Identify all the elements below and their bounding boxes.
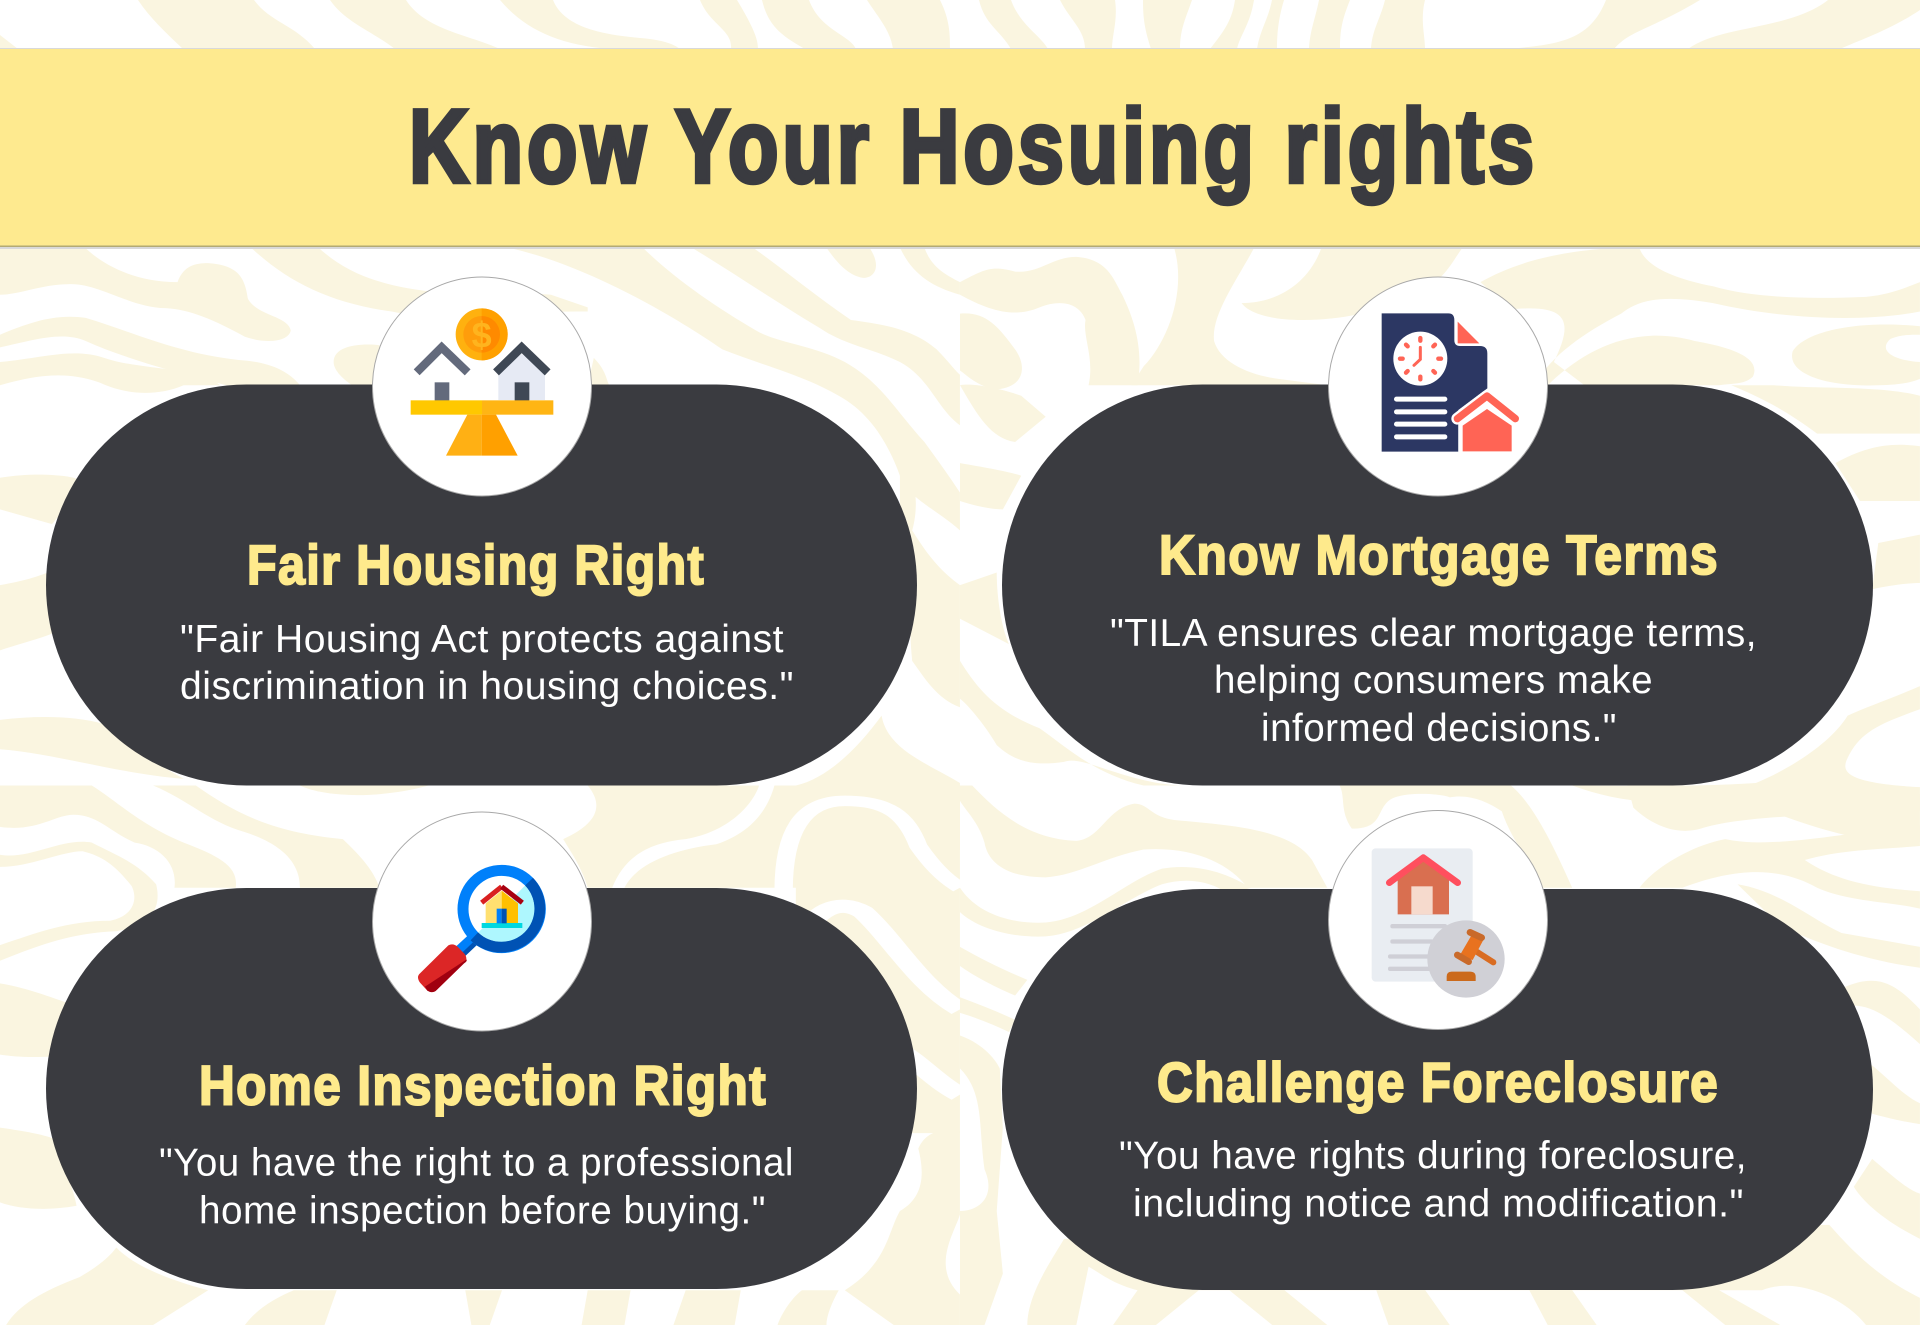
icon: scale with houses and coin <box>411 308 553 456</box>
body text <box>1119 1134 1747 1226</box>
body text <box>1110 612 1757 750</box>
upper-right region <box>960 248 1920 842</box>
body text: including notice and modification." <box>1133 1182 1744 1226</box>
icon circle <box>1328 810 1548 1030</box>
heading: Challenge Foreclosure <box>1157 1050 1719 1114</box>
icon: foreclosure document with gavel <box>1372 848 1505 998</box>
panel: challenge foreclosure <box>1002 810 1873 1290</box>
lower-left region <box>0 786 960 1325</box>
body text: discrimination in housing choices." <box>180 665 794 708</box>
icon circle <box>372 812 592 1031</box>
body text: "You have rights during foreclosure, <box>1119 1134 1747 1178</box>
title banner <box>0 48 1920 249</box>
icon circle <box>1328 277 1548 496</box>
body text: "You have the right to a professional <box>159 1142 794 1184</box>
body text <box>180 618 794 708</box>
panel: fair housing right <box>46 277 917 786</box>
panel: know mortgage terms <box>1002 277 1873 786</box>
body text: home inspection before buying." <box>199 1190 766 1232</box>
upper-left region <box>0 248 960 850</box>
panel: home inspection right <box>46 812 917 1289</box>
body text <box>159 1142 794 1232</box>
body text: "TILA ensures clear mortgage terms, <box>1110 612 1757 655</box>
title: Know Your Hosuing rights <box>409 89 1538 205</box>
body text: helping consumers make <box>1214 659 1653 702</box>
body text: informed decisions." <box>1261 707 1617 750</box>
heading: Home Inspection Right <box>199 1054 767 1116</box>
lower-right region <box>960 786 1920 1325</box>
body text: "Fair Housing Act protects against <box>180 618 784 661</box>
heading: Fair Housing Right <box>247 533 705 596</box>
icon: scale with houses and coin: $ <box>472 314 492 355</box>
icon: magnifying glass over house <box>418 870 540 992</box>
icon circle <box>372 277 592 496</box>
heading: Know Mortgage Terms <box>1159 523 1719 586</box>
icon: mortgage document with clock and house <box>1382 313 1517 452</box>
